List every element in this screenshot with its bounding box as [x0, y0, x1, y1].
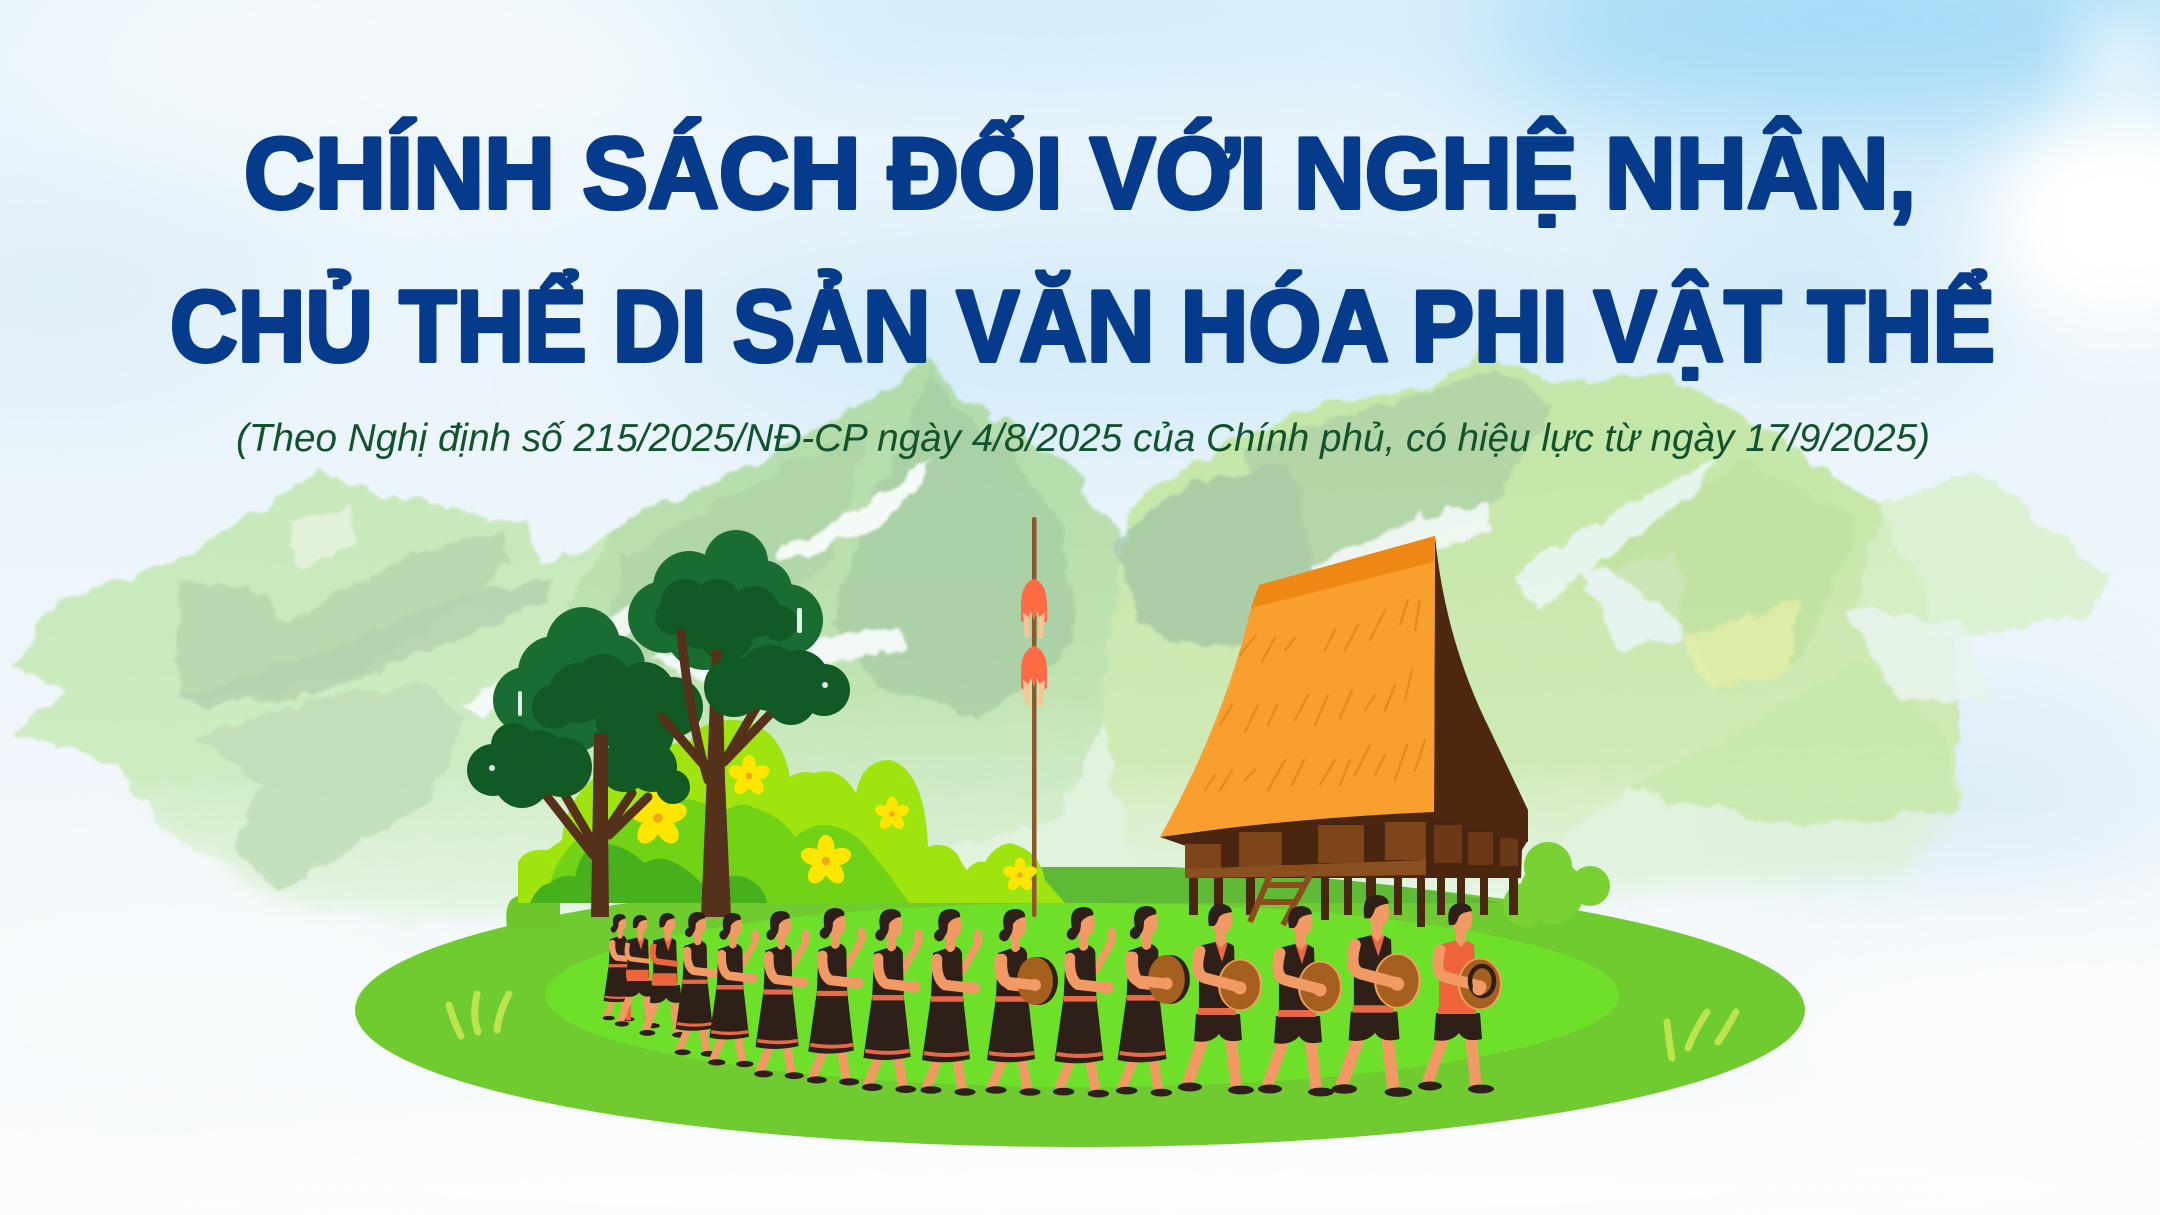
- person 4: [674, 912, 721, 1057]
- title: CHỦ THỂ DI SẢN VĂN HÓA PHI VẬT THỂ: [170, 270, 1995, 383]
- icon: pole ornament lower: [1021, 646, 1047, 705]
- left base bump: [506, 896, 560, 928]
- person 14 with gong: [1258, 906, 1342, 1096]
- tree left: [467, 607, 703, 917]
- dark bush: [530, 843, 767, 903]
- title: CHÍNH SÁCH ĐỐI VỚI NGHỆ NHÂN,: [244, 117, 1916, 230]
- house roof side: [1434, 536, 1528, 842]
- person 1: [603, 914, 637, 1021]
- left mountain: [12, 472, 700, 925]
- tree right: dark inner foliage: [655, 579, 797, 661]
- person 5: [708, 913, 759, 1067]
- ground: outer green island: [355, 867, 1805, 1147]
- person 8: [862, 909, 923, 1093]
- tree right: [628, 530, 850, 917]
- tree right: lower foliage: [704, 645, 850, 725]
- title: [170, 117, 1995, 383]
- person 15 with gong: [1332, 895, 1421, 1097]
- person 13 with gong: [1178, 904, 1262, 1094]
- lime bush: [518, 720, 1065, 903]
- soft wash under mountains: [150, 640, 1960, 920]
- ground: inner light lawn: [545, 903, 1619, 1087]
- procession of dancers: [603, 895, 1502, 1098]
- flowers on bushes: [627, 755, 1038, 892]
- tree right: upper foliage: [628, 530, 823, 670]
- person 10 with gong: [986, 909, 1058, 1096]
- house ladder: [1250, 866, 1315, 925]
- subtitle: (Theo Nghị định số 215/2025/NĐ-CP ngày 4/8/2025 của Chính phủ, có hiệu lực từ ngày 17/9/2025): [236, 417, 1930, 460]
- person 16 with ringed gong: [1418, 903, 1502, 1093]
- grass tuft right: [1667, 1012, 1736, 1058]
- bushes: [506, 720, 1610, 928]
- house roof front: [1160, 536, 1435, 837]
- grass tuft left: [449, 994, 509, 1036]
- person 11: [1053, 907, 1116, 1098]
- watercolor mountains: [12, 351, 2110, 925]
- person 12 with gong: [1116, 906, 1190, 1097]
- person 3: [639, 913, 689, 1038]
- house wall panels: [1185, 822, 1426, 869]
- tree left: front foliage: [467, 654, 703, 808]
- icon: pole ornament upper: [1021, 579, 1047, 638]
- pole: [1021, 517, 1047, 917]
- house wall: [1160, 800, 1528, 878]
- central mountain: [465, 358, 1140, 880]
- house stilts: [1189, 875, 1518, 927]
- right bush: [1503, 842, 1610, 927]
- roof thatch marks: [1205, 600, 1425, 790]
- mid-green bush: [548, 799, 909, 903]
- person 6: [754, 911, 810, 1079]
- person 7: [807, 908, 866, 1085]
- person 9: [920, 909, 982, 1096]
- tree left: back foliage: [493, 607, 645, 752]
- right twin mountain: [1100, 351, 2110, 900]
- person 2: [615, 915, 660, 1028]
- stilt longhouse: [1160, 536, 1528, 927]
